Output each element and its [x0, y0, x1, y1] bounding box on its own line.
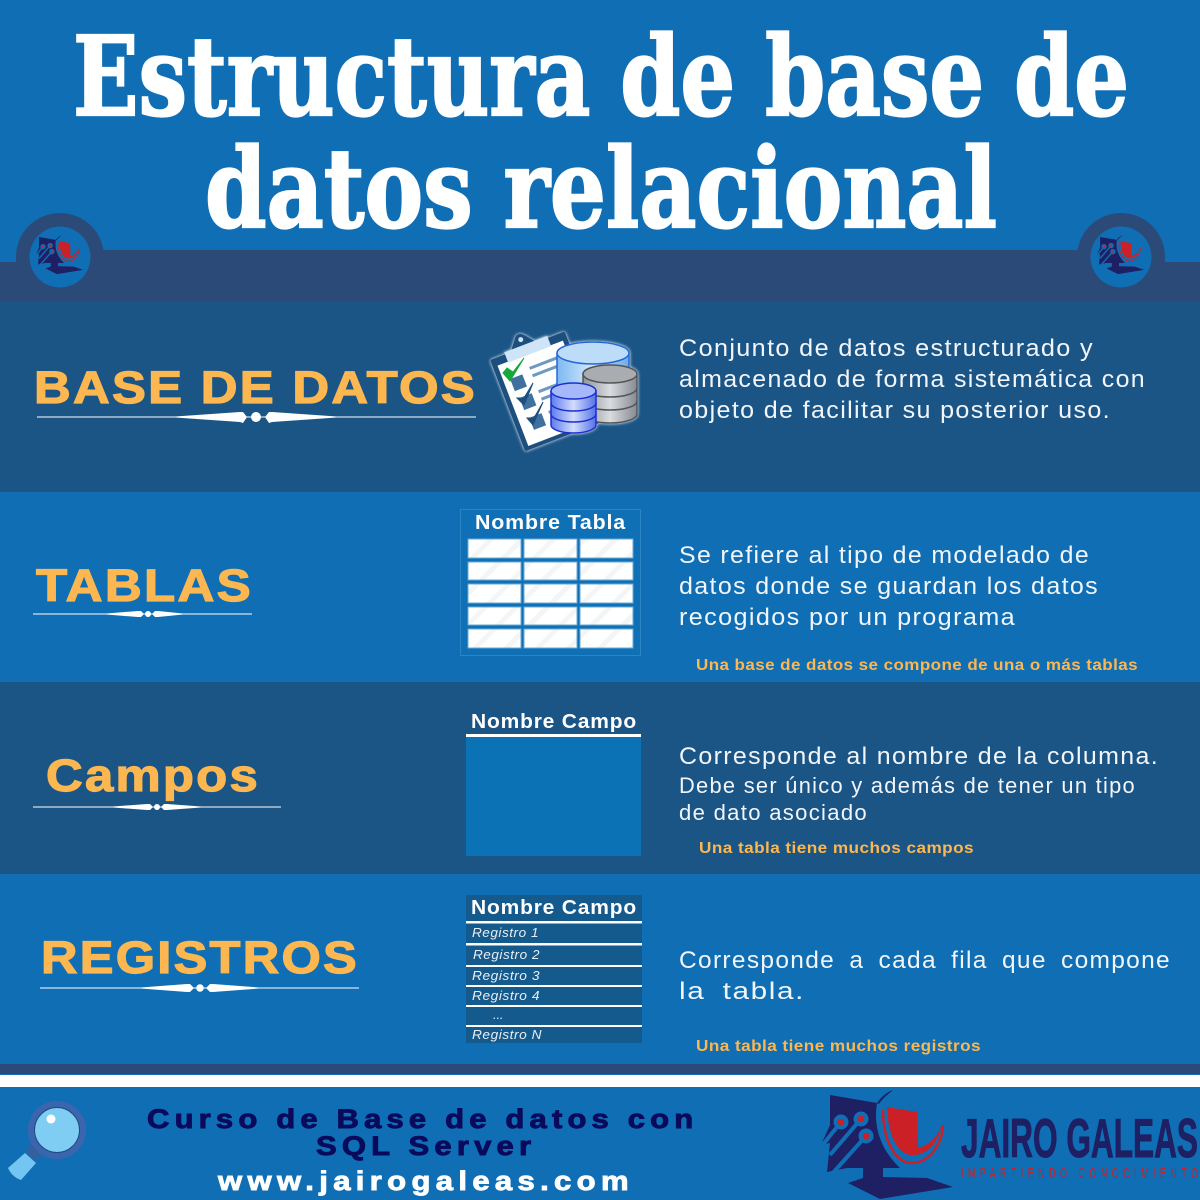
heading: base de datos: BASE DE DATOS: [34, 362, 477, 413]
course title: [147, 1105, 693, 1161]
table illustration: [460, 510, 640, 656]
panel: base de datos: [0, 301, 1200, 492]
records illustration: Registro 2: [473, 947, 540, 962]
description: registros: Corresponde a cada fila que compone: [679, 947, 1171, 974]
title: [73, 12, 1129, 253]
records illustration: Registro 1: [472, 925, 539, 940]
description: campos: [679, 743, 1159, 825]
description: tablas: [679, 542, 1099, 631]
heading: tablas: TABLAS: [36, 560, 253, 611]
header band with logo badges: [0, 213, 1200, 301]
course title: Curso de Base de datos con: [147, 1105, 693, 1134]
description: tablas: Se refiere al tipo de modelado de: [679, 542, 1090, 569]
description: campos: de dato asociado: [679, 800, 868, 825]
description: base de datos: almacenado de forma sistemática con: [679, 366, 1146, 393]
records illustration: ...: [493, 1007, 504, 1022]
description: base de datos: objeto de facilitar su posterior uso.: [679, 397, 1111, 424]
badge: right logo: [1077, 213, 1165, 301]
heading: campos: [33, 750, 281, 810]
table illustration: Nombre Tabla: [475, 511, 626, 534]
description: tablas: datos donde se guardan los datos: [679, 573, 1099, 600]
website: www.jairogaleas.com: [217, 1167, 629, 1196]
icon: clipboard and databases: [485, 318, 637, 451]
logo: jairo galeas: [821, 1090, 1198, 1199]
description: campos: Corresponde al nombre de la columna.: [679, 743, 1159, 770]
note: registros: Una tabla tiene muchos registros: [696, 1038, 981, 1055]
panel: tablas: [0, 492, 1200, 682]
heading: campos: Campos: [46, 750, 260, 801]
logo tagline: IMPARTIENDO CONOCIMIENTO: [961, 1165, 1198, 1182]
records illustration: Registro N: [472, 1027, 542, 1042]
records illustration: [466, 895, 642, 1043]
description: registros: la tabla.: [679, 978, 805, 1005]
course title: SQL Server: [316, 1132, 531, 1161]
field illustration: Nombre Campo: [471, 710, 637, 733]
field illustration: [466, 709, 641, 856]
panel: campos: [0, 682, 1200, 874]
badge: left logo: [16, 213, 104, 301]
records illustration: Registro 3: [472, 968, 540, 983]
white divider: [0, 1075, 1200, 1087]
panel: registros: [0, 874, 1200, 1064]
description: tablas: recogidos por un programa: [679, 604, 1016, 631]
bottom band: [0, 1064, 1200, 1074]
footer: [0, 1087, 1200, 1200]
records illustration: Nombre Campo: [471, 896, 637, 919]
note: campos: Una tabla tiene muchos campos: [699, 840, 974, 857]
icon: magnifying glass: [8, 1101, 86, 1180]
note: tablas: Una base de datos se compone de una o más tablas: [696, 657, 1138, 674]
title: datos relacional: [205, 124, 997, 253]
description: base de datos: [679, 335, 1146, 424]
description: base de datos: Conjunto de datos estructurado y: [679, 335, 1094, 362]
description: campos: Debe ser único y además de tener un tipo: [679, 773, 1136, 798]
heading: registros: REGISTROS: [41, 932, 359, 983]
description: registros: [679, 947, 1171, 1005]
records illustration: Registro 4: [472, 988, 540, 1003]
